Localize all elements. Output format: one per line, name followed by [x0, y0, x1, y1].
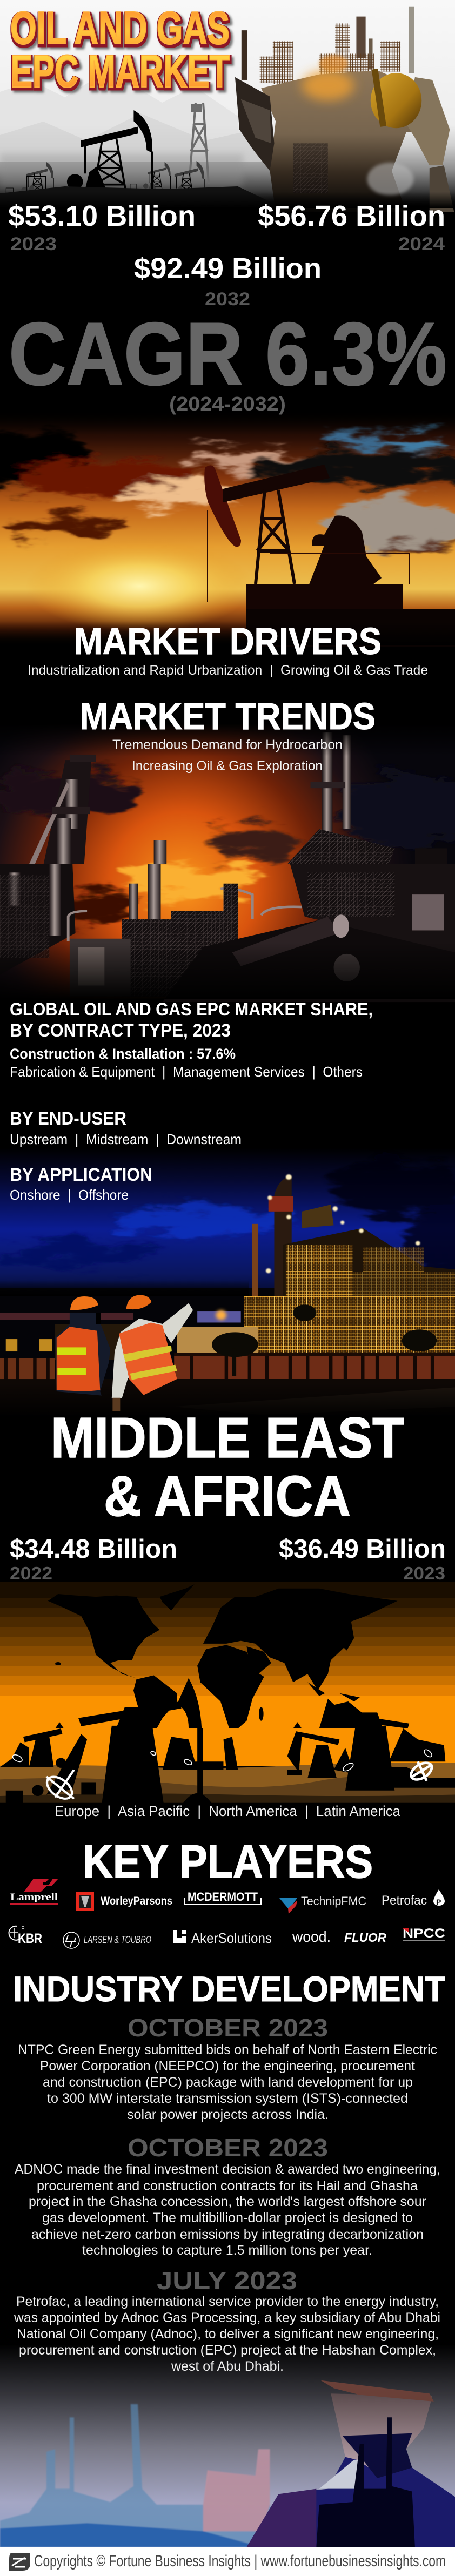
- development: October 2023 NTPC: to 300 MW interstate transmission system (ISTS)-connected: [47, 2091, 408, 2106]
- market drivers list: Industrialization and Rapid Urbanization | Growing Oil & Gas Trade: [28, 663, 428, 678]
- development: July 2023 Petrofac: National Oil Company (Adnoc), to deliver a significant new engineering,: [17, 2326, 439, 2342]
- small background pump jacks: [5, 161, 204, 200]
- segment: contract type share: GLOBAL OIL AND GAS EPC MARKET SHARE,: [10, 999, 373, 1020]
- development: October 2023 ADNOC: procurement and construction contracts for its Hail and Ghasha: [37, 2178, 418, 2194]
- workers in orange vests: [55, 1295, 193, 1411]
- pump jack silhouette: [204, 465, 455, 647]
- stat: 2023 market size: $53.10 Billion: [8, 200, 196, 232]
- white counterweight icons: [11, 1748, 435, 1803]
- ground bands: [0, 1763, 455, 1808]
- logo: WorleyParsons: WorleyParsons: [101, 1895, 172, 1907]
- right arm: [406, 77, 450, 165]
- stat: 2024 market size: [258, 200, 445, 254]
- main pump jack silhouette: [25, 110, 152, 201]
- development: July 2023 Petrofac: was appointed by Adnoc Gas Processing, a key subsidiary of Abu Dhabi: [14, 2310, 440, 2325]
- wall panels: [0, 1358, 55, 1381]
- segment: application: [10, 1165, 152, 1203]
- development: July 2023 Petrofac: [14, 2266, 440, 2374]
- CAGR period: (2024-2032): [169, 393, 286, 415]
- other regions list: Europe | Asia Pacific | North America | Latin America: [55, 1803, 401, 1819]
- stat: 2023 market size: [8, 200, 196, 254]
- development: October 2023 ADNOC: gas development. The multibillion-dollar project is designed to: [42, 2210, 413, 2225]
- left sleeve: [235, 77, 274, 171]
- logo: KBR: [9, 1926, 42, 1946]
- key players heading: KEY PLAYERS: [83, 1836, 373, 1888]
- worker silhouette: [246, 2380, 455, 2547]
- development: July 2023 Petrofac: JULY 2023: [157, 2266, 297, 2295]
- segment: end-user: [10, 1108, 242, 1147]
- bottom background: refinery and worker: [0, 2344, 455, 2547]
- sunset photo with pump jack: [0, 411, 455, 647]
- right twin stacks: [322, 732, 332, 832]
- development: October 2023 NTPC: OCTOBER 2023: [128, 2014, 328, 2042]
- far haze band: [0, 154, 243, 186]
- development: October 2023 NTPC: NTPC Green Energy submitted bids on behalf of North Eastern Electric: [18, 2042, 437, 2057]
- logo: Aker Solutions: AkerSolutions: [191, 1930, 272, 1946]
- development: July 2023 Petrofac: Petrofac, a leading international service provider to the energy industry,: [16, 2294, 439, 2309]
- blurred refinery: [0, 2404, 276, 2547]
- market trends list: Tremendous Demand for Hydrocarbon: [112, 737, 343, 752]
- logo: Fluor: FLUOR: [344, 1931, 386, 1945]
- logo: Lamprell: [10, 1879, 58, 1905]
- segment: end-user: Upstream | Midstream | Downstream: [10, 1131, 242, 1147]
- logo: WorleyParsons: [76, 1892, 172, 1911]
- region value 2023: $36.49 Billion: [279, 1535, 446, 1564]
- region value 2022: [10, 1535, 177, 1583]
- header background: mountains and oil field: [0, 0, 455, 212]
- logo: Petrofac: P: [436, 1898, 441, 1906]
- development: October 2023 NTPC: solar power projects across India.: [127, 2107, 329, 2122]
- segment: contract type share: BY CONTRACT TYPE, 2023: [10, 1020, 231, 1041]
- stat: 2032 market size: [134, 252, 322, 310]
- development: July 2023 Petrofac: procurement and construction (EPC) project at the Habshan Complex,: [19, 2343, 436, 2358]
- market trends heading: MARKET TRENDS: [80, 695, 376, 737]
- development: October 2023 ADNOC: OCTOBER 2023: [128, 2134, 328, 2162]
- region value 2023: 2023: [403, 1563, 445, 1583]
- segment: application: Onshore | Offshore: [10, 1187, 129, 1203]
- left column tower: [29, 732, 447, 864]
- yellow hard hat: [371, 73, 421, 128]
- segment: application: BY APPLICATION: [10, 1165, 152, 1185]
- pale patch near hand: [367, 163, 413, 196]
- footer bar: [0, 2547, 455, 2576]
- development: October 2023 ADNOC: ADNOC made the final investment decision & awarded two engineering,: [15, 2162, 440, 2177]
- logo: TechnipFMC: TechnipFMC: [301, 1894, 366, 1908]
- region value 2022: $34.48 Billion: [10, 1535, 177, 1564]
- lower refinery plant: [0, 864, 455, 1002]
- ground: [0, 1379, 455, 1415]
- market trends list: [112, 737, 343, 774]
- logo: Wood: wood.: [292, 1928, 331, 1945]
- refinery sunset photo: [0, 724, 455, 1002]
- development: October 2023 NTPC: Power Corporation (NEEPCO) for the engineering, procurement: [40, 2059, 415, 2074]
- logo: KBR: KBR: [18, 1931, 42, 1946]
- Fortune Business Insights logo: [9, 2553, 30, 2571]
- trees: [212, 1304, 437, 1376]
- region value 2023: [279, 1535, 446, 1583]
- worker figure with jacket: [235, 69, 454, 212]
- refinery over worker: [242, 7, 414, 84]
- ground silhouette: [0, 186, 281, 208]
- development: October 2023 ADNOC: project in the Ghasha concession, the world's largest offshore sour: [29, 2194, 426, 2209]
- blue sky plant photo: [0, 1148, 455, 1418]
- dominant region heading: & AFRICA: [104, 1464, 351, 1528]
- world map silhouette: [48, 1584, 398, 1728]
- segment: contract type share: Fabrication & Equipment | Management Services | Others: [10, 1064, 363, 1080]
- segment: end-user: BY END-USER: [10, 1108, 126, 1129]
- stepped sky: [0, 1582, 455, 1766]
- development: October 2023 ADNOC: technologies to capture 1.5 million tons per year.: [82, 2243, 372, 2258]
- title: EPC MARKET: [10, 46, 230, 97]
- development: October 2023 ADNOC: [15, 2134, 440, 2258]
- dominant region heading: [51, 1406, 404, 1528]
- title: OIL AND GAS: [10, 3, 230, 54]
- stat: 2024 market size: $56.76 Billion: [258, 200, 445, 232]
- dominant region heading: MIDDLE EAST: [51, 1406, 404, 1470]
- development: October 2023 ADNOC: achieve net-zero carbon emissions by integrating decarbonization: [31, 2227, 424, 2242]
- pump jack silhouettes: [0, 1678, 455, 1811]
- logo: TechnipFMC: [279, 1894, 366, 1914]
- title: [10, 3, 230, 97]
- dark fade under photo: [0, 621, 455, 645]
- segment: contract type share: [10, 999, 373, 1080]
- logo: Lamprell: Lamprell: [10, 1892, 58, 1903]
- logo: Larsen and Toubro: [63, 1932, 151, 1948]
- background derrick: [189, 103, 209, 184]
- orange glow: [302, 70, 354, 100]
- left worker: [55, 1296, 110, 1396]
- hand: [430, 165, 454, 212]
- stat: 2032 market size: $92.49 Billion: [134, 252, 322, 285]
- logo: Larsen and Toubro: LARSEN & TOUBRO: [84, 1934, 151, 1945]
- right worker: [112, 1295, 193, 1411]
- development: July 2023 Petrofac: west of Abu Dhabi.: [171, 2359, 284, 2374]
- market drivers heading: MARKET DRIVERS: [74, 620, 382, 662]
- logo: NPCC: NPCC: [403, 1926, 445, 1941]
- glowing plant: [252, 1174, 455, 1296]
- logo: Petrofac: [382, 1889, 445, 1908]
- segment: contract type share: Construction & Installation : 57.6%: [10, 1046, 236, 1062]
- stat: 2023 market size: 2023: [10, 234, 57, 254]
- region value 2022: 2022: [10, 1563, 52, 1583]
- development: October 2023 NTPC: and construction (EPC) package with land development for up: [43, 2075, 413, 2090]
- stat: 2024 market size: 2024: [398, 234, 445, 254]
- distant mountains: [0, 70, 281, 162]
- logo: Petrofac: Petrofac: [382, 1893, 427, 1908]
- development: October 2023 NTPC: [18, 2014, 437, 2122]
- orange world map scene: [0, 1582, 455, 1811]
- logo: McDermott: MCDERMOTT: [188, 1890, 258, 1904]
- market trends list: Increasing Oil & Gas Exploration: [132, 758, 323, 774]
- stat: 2032 market size: 2032: [205, 289, 250, 310]
